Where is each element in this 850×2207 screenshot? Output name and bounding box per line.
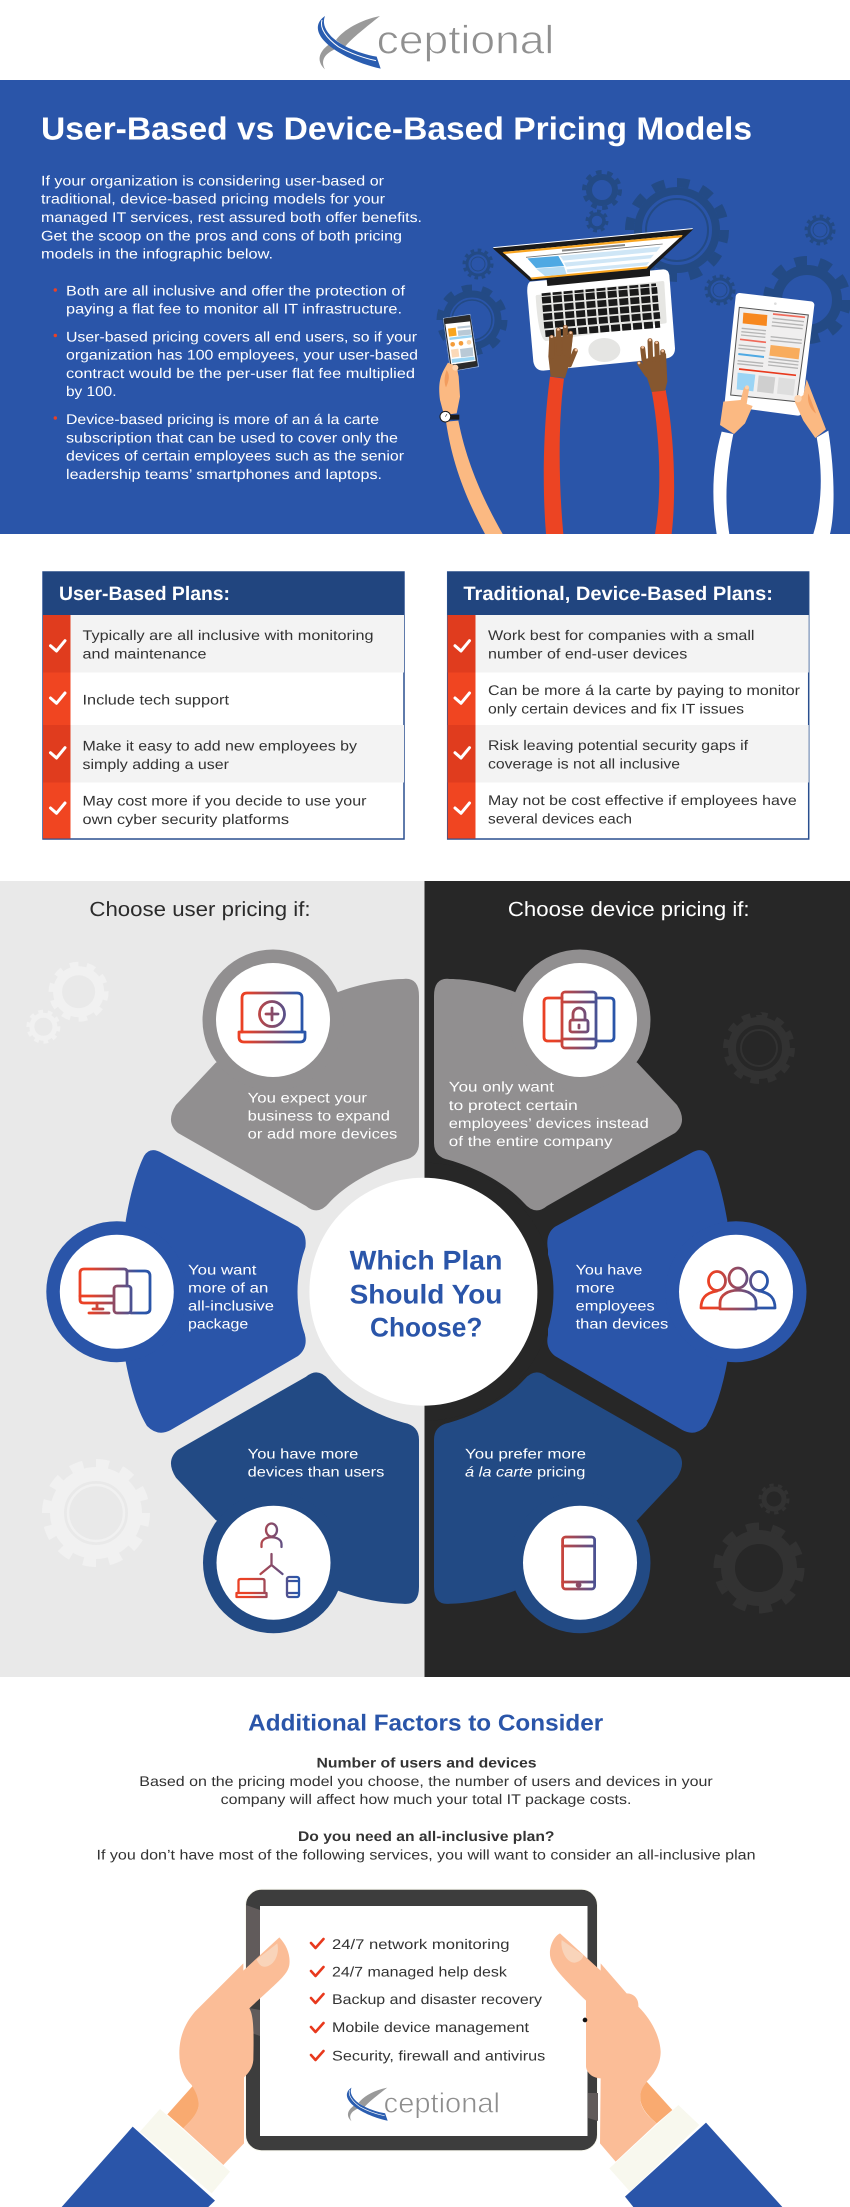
list text: number of end-user devices — [488, 645, 687, 661]
petal: more employees: than devices — [576, 1315, 668, 1331]
list text: Work best for companies with a small — [488, 627, 754, 643]
petal: protect certain devices: You only want — [449, 1079, 554, 1095]
petal: more employees: You have — [576, 1262, 643, 1278]
list text: Make it easy to add new employees by — [82, 738, 357, 754]
icon: laptop plus — [239, 993, 305, 1042]
center circle: Choose? — [370, 1313, 482, 1343]
list text: simply adding a user — [82, 756, 229, 772]
petal: protect certain devices: of the entire company — [449, 1133, 612, 1149]
bullet list: paying a flat fee to monitor all IT infrastructure. — [66, 300, 402, 316]
panel: hero — [0, 80, 850, 534]
list text: and maintenance — [82, 645, 207, 661]
text block: all-inclusive plan: If you don’t have most of the following services, you will want to consider an all-inclusive plan — [96, 1846, 756, 1862]
petal: expand business: or add more devices — [248, 1126, 397, 1142]
center circle: Which Plan — [350, 1245, 502, 1275]
intro text: traditional, device-based pricing models for your — [41, 190, 385, 206]
center circle: Should You — [350, 1279, 502, 1309]
logo — [318, 16, 554, 69]
intro text: managed IT services, rest assured both offer benefits. — [41, 209, 422, 225]
table heading — [448, 572, 809, 615]
text block: all-inclusive plan: Do you need an all-inclusive plan? — [298, 1828, 554, 1844]
list text: only certain devices and fix IT issues — [488, 700, 744, 716]
icon: multiple devices — [80, 1269, 150, 1313]
check icons — [50, 641, 65, 813]
bullet list: Device-based pricing is more of an á la carte — [66, 411, 379, 427]
petal: expand business — [171, 950, 419, 1210]
icon: people — [701, 1268, 775, 1309]
checklist — [311, 1936, 545, 2063]
bullet list: subscription that can be used to cover only the — [66, 430, 398, 446]
text block: users and devices: company will affect how much your total IT package costs. — [221, 1791, 631, 1807]
petal: all-inclusive package: You want — [188, 1262, 257, 1278]
bullet list: Both are all inclusive and offer the protection of — [66, 282, 405, 298]
petal: more employees: employees — [576, 1298, 655, 1314]
list text — [82, 627, 374, 827]
arms: tablet hands — [713, 379, 834, 534]
icon: wristwatch — [440, 411, 459, 422]
list text: May cost more if you decide to use your — [82, 793, 367, 809]
illustration: devices and hands — [439, 229, 834, 534]
bullet list: User-based pricing covers all end users, so if your — [66, 328, 417, 344]
intro text: models in the infographic below. — [41, 245, 273, 261]
list text: several devices each — [488, 810, 632, 826]
intro text: Get the scoop on the pros and cons of both pricing — [41, 227, 402, 243]
petal: protect certain devices: to protect certain — [449, 1097, 578, 1113]
hand: left holding tablet — [62, 1937, 290, 2207]
bullet list: devices of certain employees such as the senior — [66, 448, 404, 464]
table heading — [43, 572, 404, 615]
panel: which plan decision wheel — [0, 881, 850, 1677]
logo: ceptional — [377, 18, 554, 62]
logo small: ceptional — [384, 2088, 500, 2118]
arm: red sleeves — [544, 377, 674, 534]
petal: a la carte pricing: á la carte pricing — [465, 1464, 585, 1480]
background gears — [28, 965, 800, 1609]
center circle — [298, 1163, 554, 1421]
text block: users and devices: Based on the pricing model you choose, the number of users and devices in your — [139, 1773, 713, 1789]
arm: phone hand — [439, 363, 503, 534]
petal: all-inclusive package: more of an — [188, 1280, 268, 1296]
petal: more devices than users — [171, 1372, 419, 1633]
bullet list: by 100. — [66, 383, 116, 399]
petal: protect certain devices — [434, 950, 682, 1210]
bullet list: leadership teams’ smartphones and laptops. — [66, 466, 382, 482]
heading: choose user pricing: Choose user pricing if: — [89, 898, 311, 921]
list text: Typically are all inclusive with monitoring — [82, 627, 374, 643]
petal: a la carte pricing — [434, 1372, 682, 1633]
check icons — [455, 641, 470, 813]
petal: expand business: business to expand — [248, 1108, 390, 1124]
heading: choose device pricing: Choose device pricing if: — [508, 898, 750, 921]
checklist: Mobile device management — [332, 2019, 529, 2035]
petal: more devices than users: devices than users — [248, 1464, 384, 1480]
title: User-Based vs Device-Based Pricing Models — [41, 110, 752, 146]
text block: users and devices: Number of users and devices — [316, 1755, 537, 1771]
intro text — [41, 172, 422, 261]
hand: left brown — [548, 325, 577, 378]
petal: more employees: more — [576, 1280, 615, 1296]
panel: user-based plans — [43, 572, 404, 839]
petal: all-inclusive package — [46, 1150, 306, 1433]
list text: May not be cost effective if employees have — [488, 792, 797, 808]
icon: smartphone — [563, 1537, 595, 1589]
bullet list: organization has 100 employees, your user-based — [66, 346, 418, 362]
checklist: 24/7 network monitoring — [332, 1936, 510, 1952]
icon: user to devices — [236, 1524, 299, 1597]
bullet list — [54, 282, 418, 482]
list text: Include tech support — [82, 691, 229, 707]
bullet list: contract would be the per-user flat fee multiplied — [66, 365, 415, 381]
text block: all-inclusive plan — [96, 1828, 756, 1862]
petal: all-inclusive package: package — [188, 1315, 248, 1331]
checklist: Backup and disaster recovery — [332, 1991, 542, 2007]
list text — [488, 627, 800, 826]
list text: Risk leaving potential security gaps if — [488, 737, 748, 753]
petal: more employees — [547, 1150, 806, 1433]
petal: more devices than users: You have more — [248, 1446, 359, 1462]
hand: right holding tablet — [550, 1933, 782, 2207]
text block: users and devices — [139, 1755, 713, 1807]
logo small — [347, 2088, 500, 2121]
checklist: 24/7 managed help desk — [332, 1964, 508, 1980]
icon: tablet — [728, 297, 811, 412]
petal: all-inclusive package: all-inclusive — [188, 1298, 274, 1314]
icon: laptop — [493, 229, 693, 371]
petal: protect certain devices: employees’ devices instead — [449, 1115, 649, 1131]
icon: phone lock — [544, 992, 614, 1048]
intro text: If your organization is considering user-based or — [41, 172, 384, 188]
petal: expand business: You expect your — [248, 1090, 367, 1106]
petal: a la carte pricing: You prefer more — [465, 1446, 586, 1462]
list text: own cyber security platforms — [82, 811, 289, 827]
panel: additional factors — [62, 1709, 782, 2207]
table heading: Traditional, Device-Based Plans: — [463, 583, 773, 605]
list text: coverage is not all inclusive — [488, 755, 680, 771]
table heading: User-Based Plans: — [59, 583, 230, 605]
hand: right brown — [638, 339, 667, 392]
checklist: Security, firewall and antivirus — [332, 2047, 545, 2063]
hero gears — [440, 172, 846, 352]
icon: smartphone — [443, 314, 479, 371]
panel: device-based plans — [448, 572, 809, 839]
list text: Can be more á la carte by paying to monitor — [488, 682, 800, 698]
tablet — [246, 1889, 598, 2151]
heading: Additional Factors to Consider — [248, 1709, 603, 1735]
